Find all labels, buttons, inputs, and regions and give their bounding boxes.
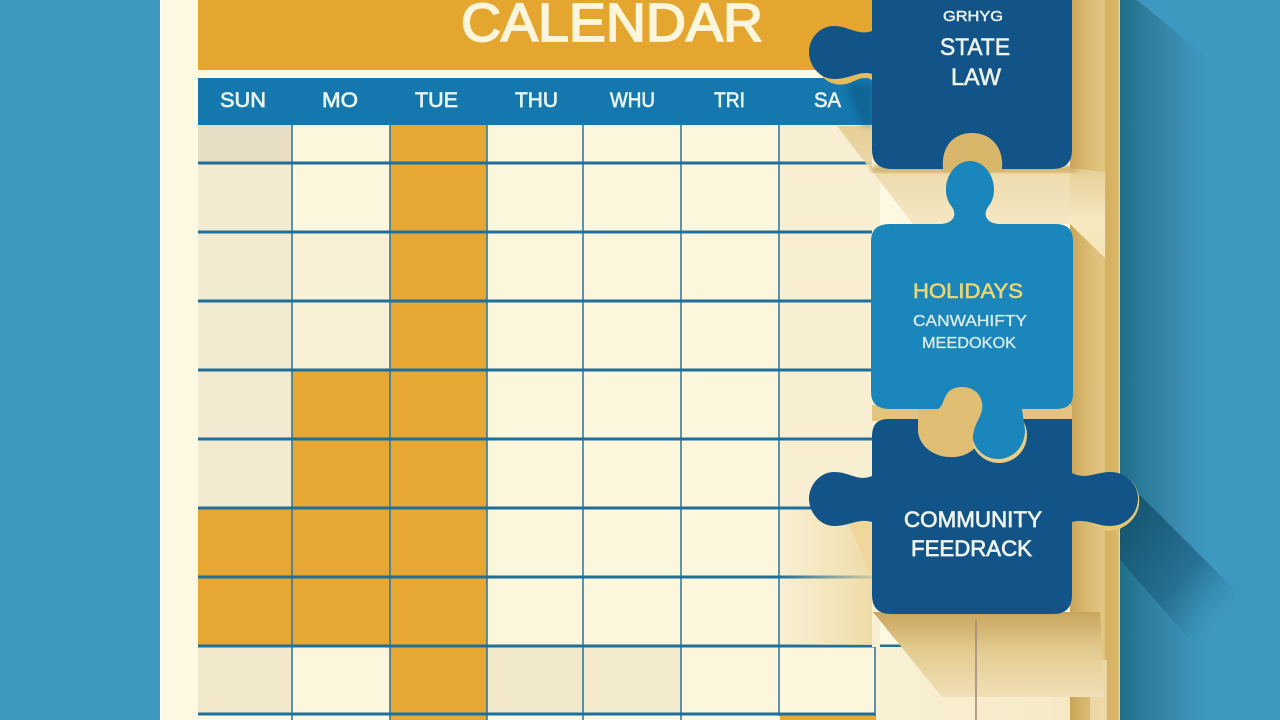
- calendar header band: [198, 0, 878, 70]
- puzzle piece: holidays: [871, 161, 1073, 459]
- piece label: community: COMMUNITY: [904, 507, 1042, 532]
- piece label: law: LAW: [951, 64, 1001, 91]
- puzzle piece: state law: [809, 0, 1072, 172]
- label: whu: WHU: [610, 89, 655, 112]
- lower page area: [876, 647, 1108, 720]
- right page edge: [1070, 0, 1120, 720]
- piece label: state: STATE: [940, 34, 1010, 61]
- piece label: holidays: HOLIDAYS: [913, 280, 1023, 303]
- label: sun: SUN: [220, 89, 266, 112]
- cast shadow of right knob: [1120, 495, 1235, 640]
- gold notch in holiday piece: [932, 387, 982, 442]
- label: tri: TRI: [714, 89, 745, 112]
- label: sa: SA: [814, 89, 841, 112]
- label: mo: MO: [322, 89, 358, 112]
- calendar grid: [198, 125, 905, 720]
- piece label: small heading: GRHYG: [943, 8, 1003, 25]
- weekday bar: [198, 78, 878, 125]
- puzzle piece: community feedback: [809, 419, 1139, 614]
- gold notch in community piece: [918, 405, 1000, 457]
- calendar sheet: [160, 0, 1120, 720]
- piece label: feedback: FEEDRACK: [911, 536, 1032, 561]
- rim under holiday knob: [971, 407, 1027, 463]
- piece label: community: CANWAHIFTY: [913, 313, 1027, 330]
- puzzle drop shadows: [780, 125, 1105, 697]
- faint grid line in shadow: [975, 620, 977, 720]
- grid cell fills: [198, 125, 878, 720]
- label: tue: TUE: [415, 89, 458, 112]
- piece label: feedback: MEEDOKOK: [922, 335, 1016, 352]
- label: thu: THU: [515, 89, 558, 112]
- paper shadow on the wall: [1120, 0, 1210, 720]
